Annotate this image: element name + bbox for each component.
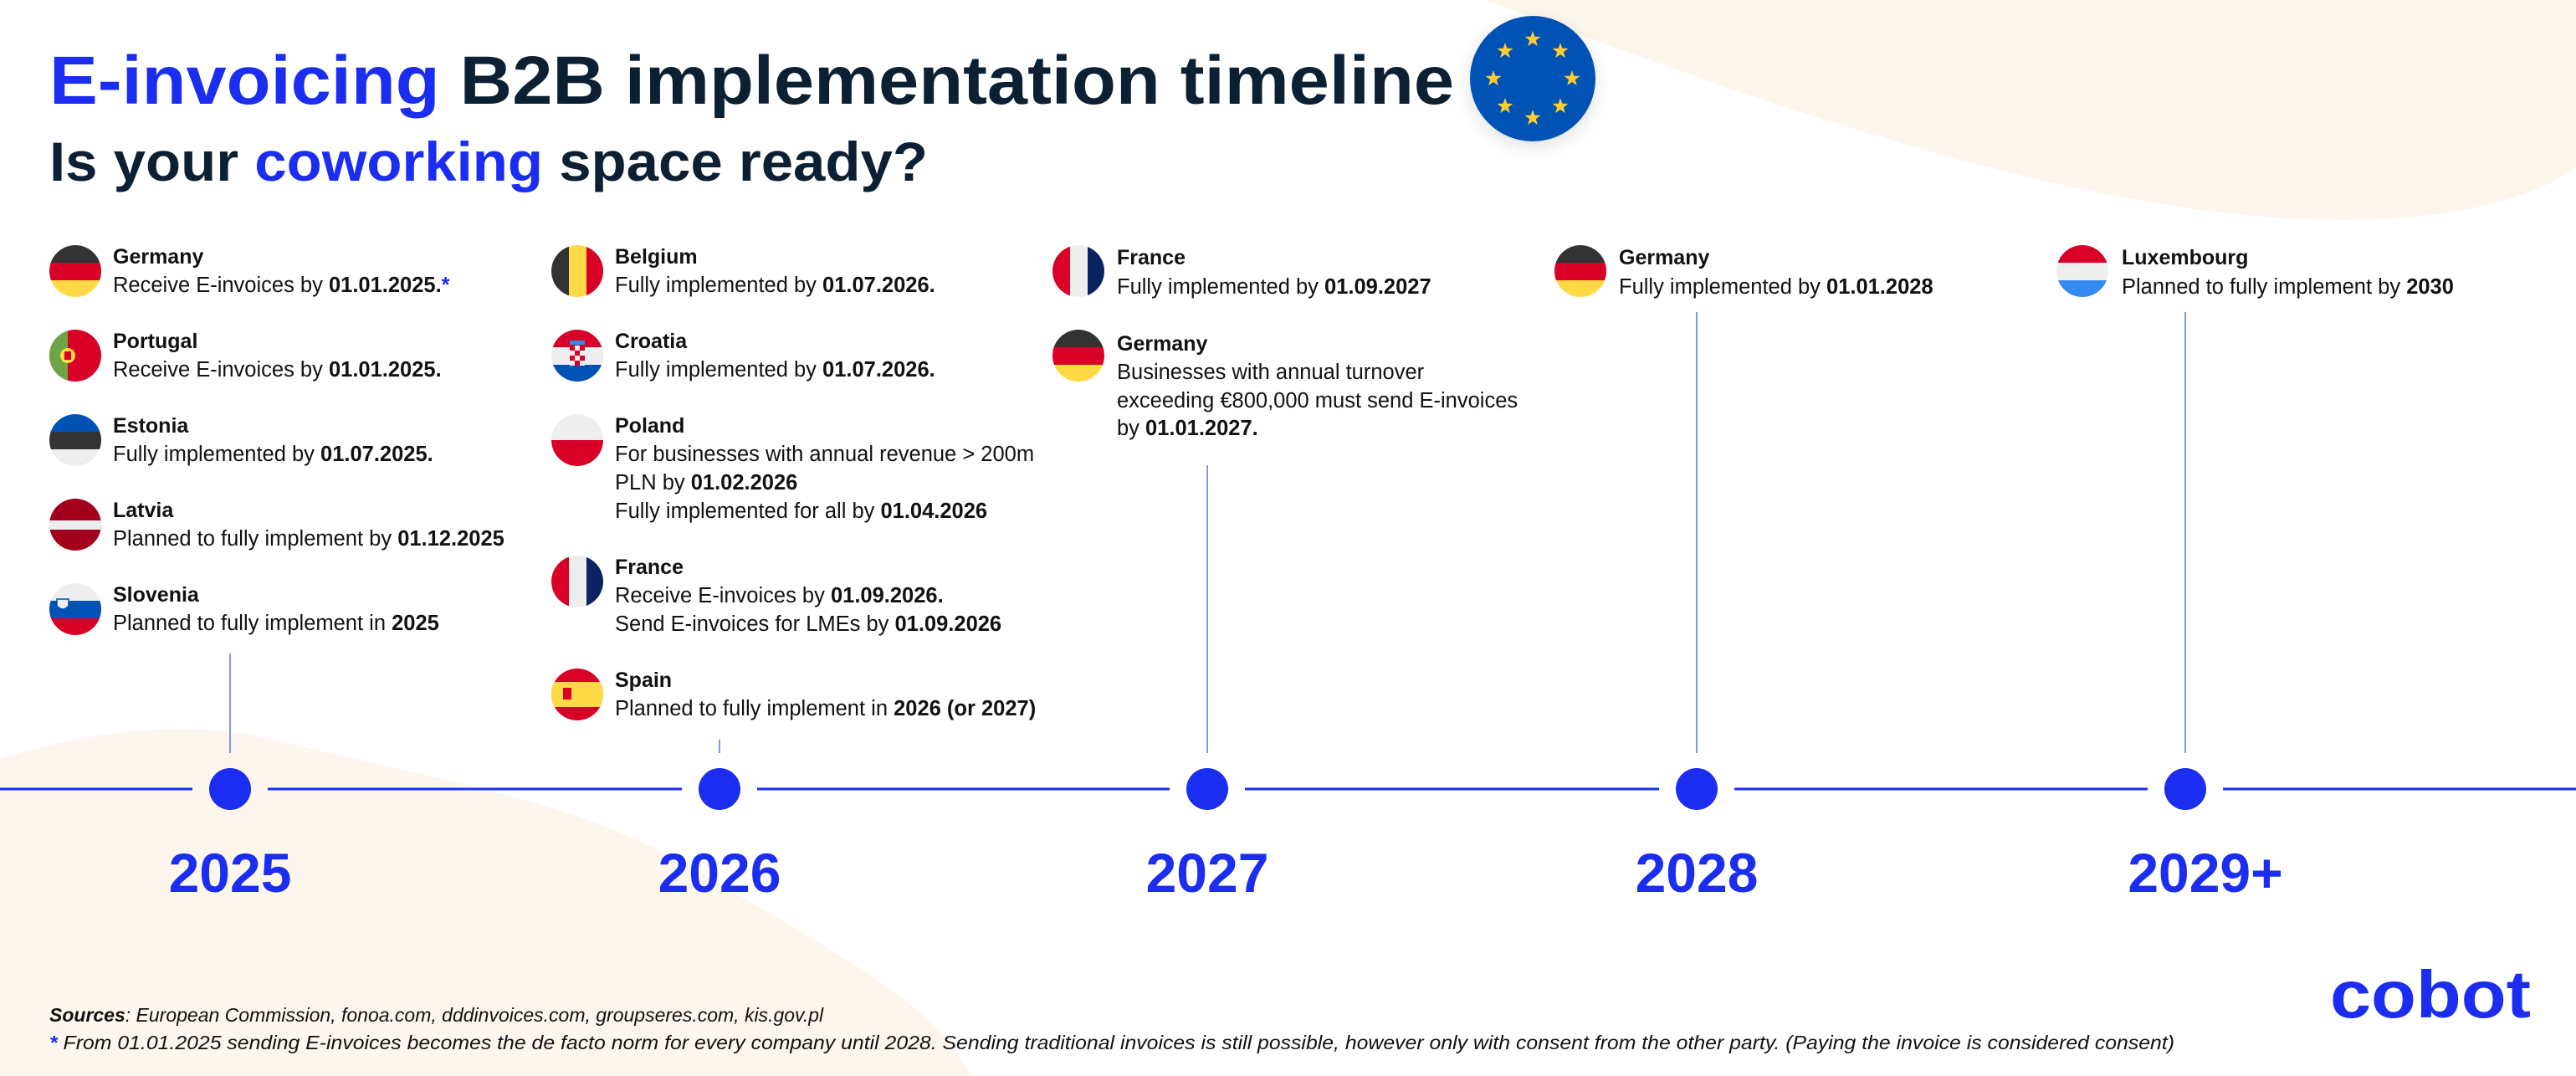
entry: Croatia — [551, 330, 935, 382]
entry: Poland — [551, 414, 1034, 523]
entry: Germany 2027: exceeding €800,000 must send E-invoices — [1117, 389, 1518, 412]
year labels: 2029+ — [2128, 842, 2283, 904]
entry: Portugal: Receive E-invoices by 01.01.2025. — [113, 358, 442, 382]
entry: Slovenia: Slovenia — [113, 583, 200, 607]
entry: Germany 2027: Germany — [1117, 332, 1207, 356]
entry: Croatia: Croatia — [615, 330, 688, 353]
entry: France 2026: France — [615, 556, 684, 579]
entry: Germany 2025: Receive E-invoices by 01.01.2025.* — [113, 274, 450, 297]
entry: Estonia — [49, 414, 433, 466]
entry: France 2027: France — [1117, 246, 1186, 269]
entry: Slovenia: Planned to fully implement in 2025 — [113, 612, 439, 635]
icon: EU flag — [1470, 16, 1595, 141]
entry: Latvia — [49, 499, 504, 551]
entry: Spain — [551, 669, 1036, 720]
entry: Germany 2028 — [1554, 245, 1933, 299]
entry: France 2026 — [551, 556, 1001, 636]
background blob top right — [1485, 0, 2576, 220]
title: E-invoicing B2B implementation timeline — [49, 43, 1454, 119]
column: 2025 — [49, 245, 504, 635]
column: 2027 — [1052, 245, 1518, 440]
entry: Germany 2027: Businesses with annual turnover — [1117, 361, 1425, 384]
year labels: 2027 — [1146, 842, 1268, 904]
entry: Germany 2025 — [49, 245, 450, 297]
year labels — [169, 842, 2283, 904]
entry: Slovenia — [49, 583, 439, 635]
entry: France 2027: Fully implemented by 01.09.2027 — [1117, 275, 1431, 299]
entry: Portugal — [49, 330, 442, 382]
entry: Germany 2028: Germany — [1619, 246, 1709, 269]
year labels: 2025 — [169, 842, 291, 904]
subtitle: Is your coworking space ready? — [49, 131, 928, 192]
logo: cobot: cobot — [2330, 957, 2531, 1032]
connector lines — [230, 312, 2185, 753]
year labels: 2028 — [1636, 842, 1758, 904]
entry: France 2026: Send E-invoices for LMEs by 01.09.2026 — [615, 612, 1001, 636]
entry: Latvia: Planned to fully implement by 01.12.2025 — [113, 527, 504, 551]
entry: Portugal: Portugal — [113, 330, 197, 353]
entry: Luxembourg: Luxembourg — [2122, 246, 2248, 269]
entry: Belgium: Fully implemented by 01.07.2026. — [615, 274, 935, 297]
entry: France 2026: Receive E-invoices by 01.09.2026. — [615, 584, 944, 607]
entry: Estonia: Fully implemented by 01.07.2025. — [113, 443, 433, 466]
background blob bottom left — [0, 729, 970, 1076]
entry: Belgium: Belgium — [615, 245, 698, 269]
column: 2029+ — [2056, 245, 2454, 299]
entry: Germany 2028: Fully implemented by 01.01.2028 — [1619, 275, 1933, 299]
footnote: * From 01.01.2025 sending E-invoices becomes the de facto norm for every company until 2028. Sending traditional invoices is still possible, however only with consent from the other party. (Paying the invoice is considered consent) — [49, 1032, 2174, 1053]
entry: Poland: PLN by 01.02.2026 — [615, 471, 797, 494]
entry: Germany 2025: Germany — [113, 245, 203, 269]
entry: Croatia: Fully implemented by 01.07.2026. — [615, 358, 935, 382]
entry: France 2027 — [1052, 245, 1431, 299]
entry: Luxembourg: Planned to fully implement by 2030 — [2122, 275, 2454, 299]
entry: Germany 2027: by 01.01.2027. — [1117, 417, 1258, 440]
entry: Poland: Poland — [615, 414, 684, 438]
entry: Estonia: Estonia — [113, 414, 189, 438]
entry: Germany 2027 — [1052, 330, 1518, 440]
entry: Belgium — [551, 245, 935, 297]
entry: Poland: Fully implemented for all by 01.04.2026 — [615, 500, 987, 523]
column: 2026 — [551, 245, 1036, 720]
entry: Latvia: Latvia — [113, 499, 174, 522]
year labels: 2026 — [658, 842, 781, 904]
column: 2028 — [1554, 245, 1933, 299]
entry: Poland: For businesses with annual revenue > 200m — [615, 443, 1034, 466]
sources: Sources: European Commission, fonoa.com, dddinvoices.com, groupseres.com, kis.gov.pl — [49, 1004, 824, 1026]
entry: Spain: Planned to fully implement in 2026 (or 2027) — [615, 697, 1036, 720]
entry: Spain: Spain — [615, 669, 672, 692]
entry: Luxembourg — [2056, 245, 2454, 299]
timeline — [0, 768, 2576, 810]
